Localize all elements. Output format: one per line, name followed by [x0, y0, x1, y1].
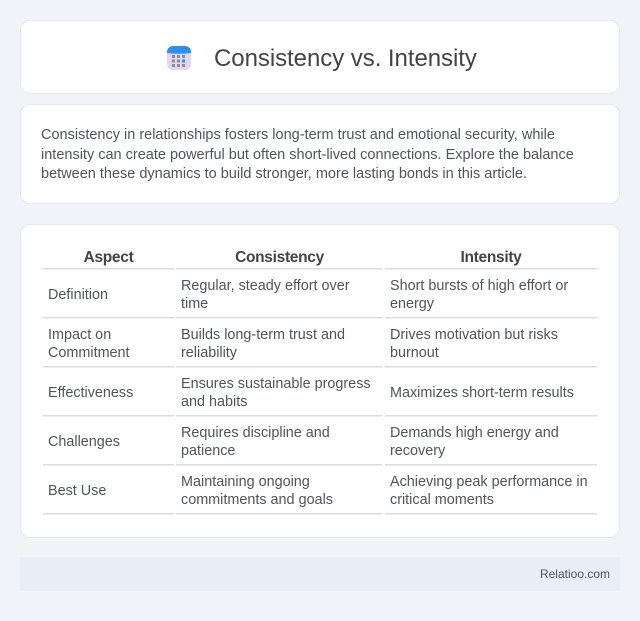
row: challenges: patience	[181, 443, 235, 459]
row: definition: energy	[390, 296, 434, 312]
row: impact on commitment: reliability	[181, 345, 237, 361]
row: best use: critical moments	[390, 492, 494, 508]
row: challenges: Demands high energy and	[390, 425, 559, 441]
row: challenges: Challenges	[48, 434, 120, 450]
row: best use: Best Use	[48, 483, 106, 499]
intro panel	[20, 104, 620, 204]
intro text: Consistency in relationships fosters long-term trust and emotional security, while	[41, 127, 555, 143]
intro text	[41, 127, 574, 182]
row: definition: Short bursts of high effort or	[390, 278, 568, 294]
intro text: between these dynamics to build stronger, more lasting bonds in this article.	[41, 166, 527, 182]
row: best use: Achieving peak performance in	[390, 474, 588, 490]
column headers	[84, 249, 522, 266]
footer bar	[20, 557, 620, 591]
row: effectiveness: and habits	[181, 394, 247, 410]
row: best use: commitments and goals	[181, 492, 333, 508]
comparison table	[43, 249, 597, 515]
row: challenges: recovery	[390, 443, 445, 459]
row: definition: time	[181, 296, 208, 312]
title: Consistency vs. Intensity	[214, 45, 477, 72]
column headers: Intensity	[460, 249, 522, 266]
row: impact on commitment: Builds long-term trust and	[181, 327, 345, 343]
column headers: Aspect	[84, 249, 133, 266]
row: impact on commitment	[48, 327, 558, 361]
row: impact on commitment: Drives motivation but risks	[390, 327, 558, 343]
header panel	[20, 20, 620, 94]
row: challenges: Requires discipline and	[181, 425, 330, 441]
row: effectiveness: Effectiveness	[48, 385, 133, 401]
row: impact on commitment: Impact on	[48, 327, 111, 343]
row: definition: Definition	[48, 287, 108, 303]
row: effectiveness	[48, 376, 574, 410]
table panel	[20, 224, 620, 538]
row: definition	[48, 278, 568, 312]
row: definition: Regular, steady effort over	[181, 278, 350, 294]
row: effectiveness: Ensures sustainable progress	[181, 376, 371, 392]
icon: calendar	[167, 46, 191, 70]
row: effectiveness: Maximizes short-term results	[390, 385, 574, 401]
column headers: Consistency	[235, 249, 324, 266]
row: impact on commitment: burnout	[390, 345, 439, 361]
row: best use: Maintaining ongoing	[181, 474, 310, 490]
row: best use	[48, 474, 588, 508]
footer text: Relatioo.com	[540, 567, 610, 581]
row: impact on commitment: Commitment	[48, 345, 130, 361]
intro text: intensity can create powerful but often short-lived connections. Explore the balance	[41, 146, 574, 162]
row: challenges	[48, 425, 559, 459]
